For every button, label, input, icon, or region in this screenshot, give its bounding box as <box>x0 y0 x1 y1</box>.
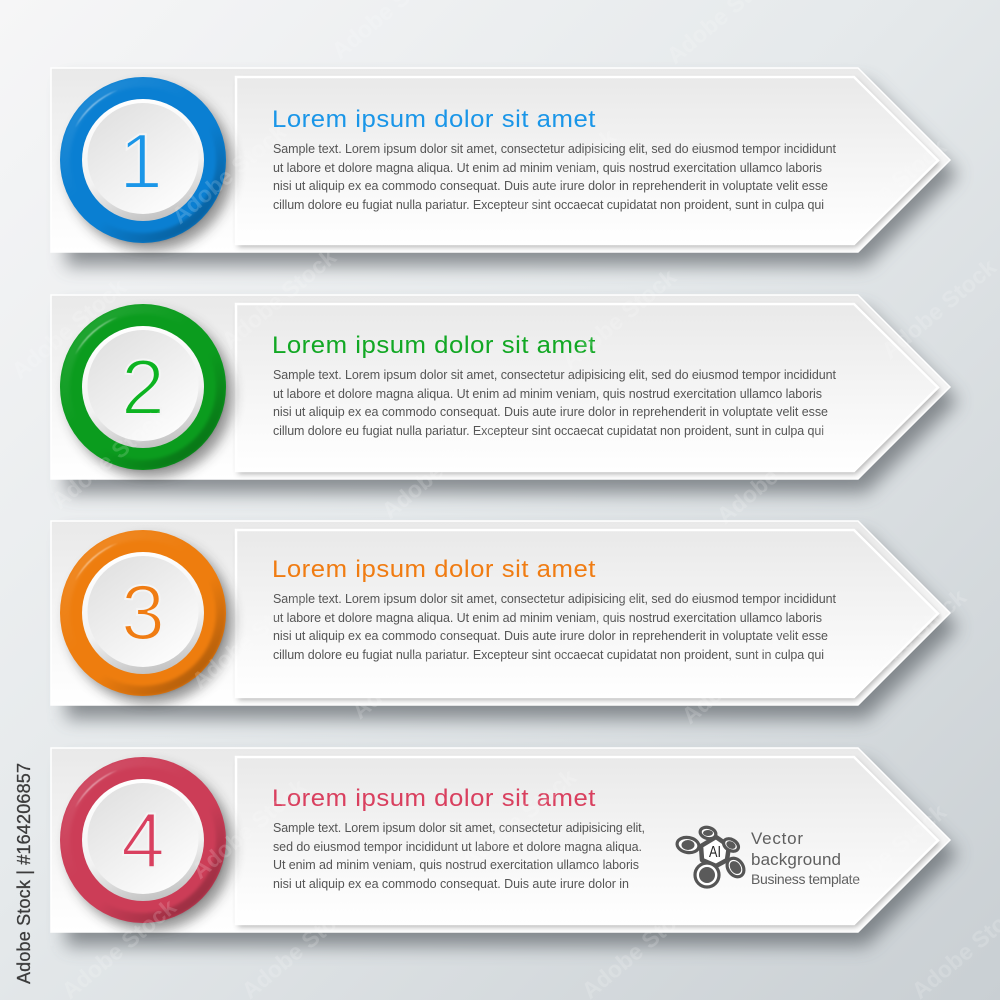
watermarks: Adobe Stock <box>557 263 681 374</box>
banner 2 inner arrow panel <box>236 304 938 471</box>
logo caption <box>751 829 860 887</box>
banner 1 shadow <box>66 82 958 266</box>
banner 3 inner arrow panel <box>236 530 938 697</box>
banner 4 body text <box>273 821 645 891</box>
watermarks: Adobe Stock <box>827 133 951 244</box>
watermarks: Adobe Stock <box>877 253 1000 364</box>
banner 1 body text: Sample text. Lorem ipsum dolor sit amet, consectetur adipisicing elit, sed do eiusmod tempor incididunt <box>273 142 837 156</box>
banner 1 number badge <box>60 77 233 251</box>
banner 4 body text: sed do eiusmod tempor incididunt ut labore et dolore magna aliqua. <box>273 840 642 854</box>
banner 4 title: Lorem ipsum dolor sit amet <box>272 785 596 812</box>
banner 4 inner arrow shadow <box>238 760 940 927</box>
stock id label: Adobe Stock | #164206857 <box>14 763 34 984</box>
watermarks: Adobe Stock <box>677 618 801 729</box>
banner 3 body text: cillum dolore eu fugiat nulla pariatur. Excepteur sint occaecat cupidatat non proident, sunt in culpa qui <box>273 648 824 662</box>
banner 2 body text: nisi ut aliquip ex ea commodo consequat. Duis aute irure dolor in reprehenderit in voluptate velit esse <box>273 405 828 419</box>
watermarks: Adobe Stock <box>377 413 501 524</box>
banner 2 <box>51 295 958 493</box>
logo caption: background <box>751 850 841 869</box>
watermarks: Adobe Stock <box>167 118 291 229</box>
watermarks: Adobe Stock <box>497 123 621 234</box>
banner 1 body text: nisi ut aliquip ex ea commodo consequat. Duis aute irure dolor in reprehenderit in voluptate velit esse <box>273 179 828 193</box>
banner 4 <box>51 748 958 946</box>
logo caption: Business template <box>751 871 860 887</box>
banner 1 body text: cillum dolore eu fugiat nulla pariatur. Excepteur sint occaecat cupidatat non proident, sunt in culpa qui <box>273 198 824 212</box>
banner 3 body text <box>273 592 837 662</box>
banner 4 number badge <box>60 757 233 931</box>
banner 4 body text: nisi ut aliquip ex ea commodo consequat. Duis aute irure dolor in <box>273 877 629 891</box>
number 2: 2 <box>121 343 165 431</box>
icon label AI: AI <box>709 844 721 861</box>
banner 3 outer arrow panel <box>51 521 950 705</box>
banner 1 title: Lorem ipsum dolor sit amet <box>272 106 596 133</box>
banner 1 outer arrow panel <box>51 68 950 252</box>
banner 3 body text: nisi ut aliquip ex ea commodo consequat. Duis aute irure dolor in reprehenderit in voluptate velit esse <box>273 629 828 643</box>
watermarks: Adobe Stock <box>457 763 581 874</box>
banner 2 body text <box>273 368 837 438</box>
watermarks: Adobe Stock <box>847 583 971 694</box>
watermarks: Adobe Stock <box>217 243 341 354</box>
banner 1 body text <box>273 142 837 212</box>
watermarks: Adobe Stock <box>712 418 836 529</box>
banner 2 body text: cillum dolore eu fugiat nulla pariatur. Excepteur sint occaecat cupidatat non proident, sunt in culpa qui <box>273 424 824 438</box>
banner 3 body text: ut labore et dolore magna aliqua. Ut enim ad minim veniam, quis nostrud exercitation ullamco laboris <box>273 611 822 625</box>
banner 2 outer arrow panel <box>51 295 950 479</box>
banner 3 shadow <box>66 535 958 719</box>
banner 1 body text: ut labore et dolore magna aliqua. Ut enim ad minim veniam, quis nostrud exercitation ullamco laboris <box>273 161 822 175</box>
banner 2 shadow <box>66 309 958 493</box>
watermarks: Adobe Stock <box>187 583 311 694</box>
icon: AI hub logo <box>676 826 747 887</box>
number 1: 1 <box>119 117 163 205</box>
watermarks: Adobe Stock <box>187 773 311 884</box>
banner 3 title: Lorem ipsum dolor sit amet <box>272 556 596 583</box>
banner 2 body text: Sample text. Lorem ipsum dolor sit amet, consectetur adipisicing elit, sed do eiusmod tempor incididunt <box>273 368 837 382</box>
banner 3 number badge <box>60 530 233 704</box>
watermarks: Adobe Stock <box>517 583 641 694</box>
banner 3 inner arrow shadow <box>238 533 940 700</box>
logo caption: Vector <box>751 829 803 848</box>
banner 4 outer arrow panel <box>51 748 950 932</box>
banner 2 inner arrow shadow <box>238 307 940 474</box>
watermarks: Adobe Stock <box>347 613 471 724</box>
banner 2 body text: ut labore et dolore magna aliqua. Ut enim ad minim veniam, quis nostrud exercitation ullamco laboris <box>273 387 822 401</box>
banner 1 inner arrow shadow <box>238 80 940 247</box>
banner 4 shadow <box>66 762 958 946</box>
watermarks: Adobe Stock <box>827 798 951 909</box>
number 4: 4 <box>121 796 165 884</box>
banner 4 body text: Ut enim ad minim veniam, quis nostrud exercitation ullamco laboris <box>273 858 639 872</box>
banner 3 <box>51 521 958 719</box>
banner 4 body text: Sample text. Lorem ipsum dolor sit amet, consectetur adipisicing elit, <box>273 821 645 835</box>
banner 4 inner arrow panel <box>236 757 938 924</box>
banner 3 body text: Sample text. Lorem ipsum dolor sit amet, consectetur adipisicing elit, sed do eiusmod tempor incididunt <box>273 592 837 606</box>
banner 2 title: Lorem ipsum dolor sit amet <box>272 332 596 359</box>
number 3: 3 <box>121 568 165 656</box>
banner 1 <box>51 68 958 266</box>
banner 1 inner arrow panel <box>236 77 938 244</box>
watermarks: Adobe Stock <box>47 403 171 514</box>
watermarks: Adobe Stock <box>7 273 131 384</box>
banner 2 number badge <box>60 304 233 478</box>
